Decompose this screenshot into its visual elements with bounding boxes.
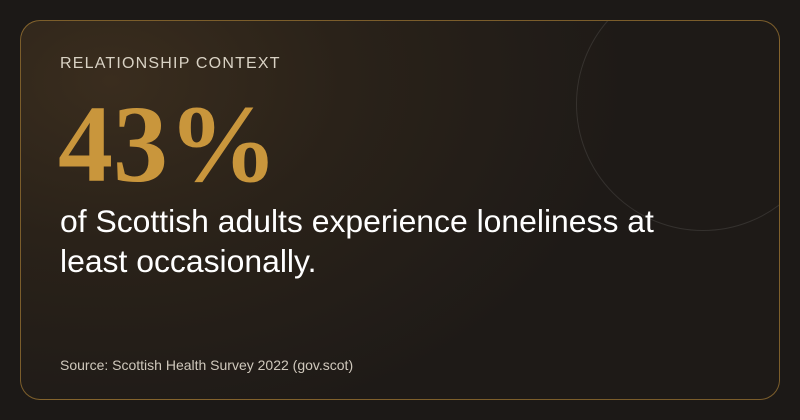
- source: Source: Scottish Health Survey 2022 (gov.scot): [60, 357, 353, 373]
- decorative circle: [576, 0, 800, 231]
- label: RELATIONSHIP CONTEXT: [60, 55, 281, 72]
- description: of Scottish adults experience loneliness at least occasionally.: [60, 203, 654, 279]
- big stat: 43%: [58, 83, 278, 205]
